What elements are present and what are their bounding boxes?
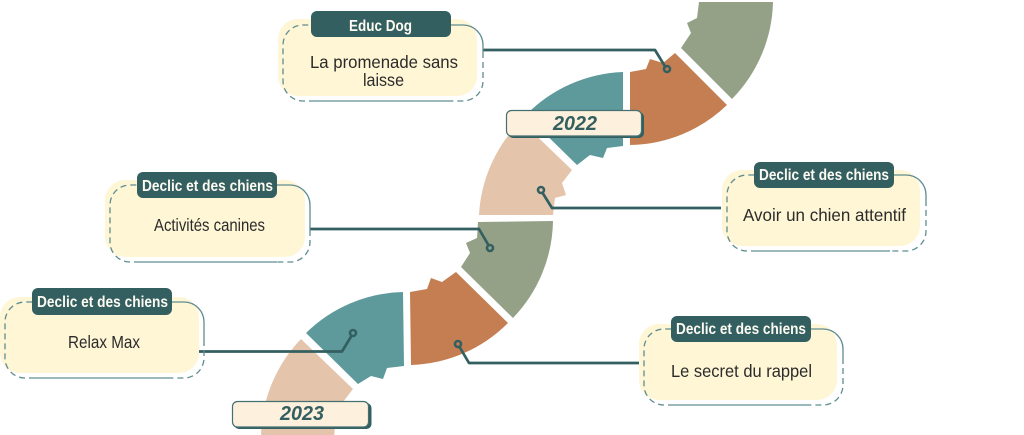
header pill [311,11,451,37]
card outline [283,25,483,101]
card background [639,324,837,400]
connector: Le secret du rappel [455,341,643,363]
card: Avoir un chien attentif [722,162,926,251]
segment: top teal [526,72,623,165]
card outline [5,302,204,378]
card background [722,170,920,246]
card: Relax Max [0,288,204,378]
year label: 2023: 2023 [279,403,324,425]
body text: Activités canines [154,215,265,235]
year label: 2022: 2022 [552,113,597,135]
segment: middle orange [410,272,508,365]
header text: Declic et des chiens [142,178,273,195]
header pill [671,316,811,342]
header pill [32,288,172,315]
card background [278,19,477,96]
card outline [110,185,310,262]
card background [0,297,199,373]
year label: 2022 [506,110,644,138]
segment: lower teal [306,292,404,384]
connector: Educ Dog [483,50,670,72]
segment: top orange [630,53,727,145]
body text: Relax Max [68,332,140,352]
winding path segments [261,2,773,435]
segment: lower beige [261,339,353,435]
header text: Declic et des chiens [676,321,806,338]
header text: Educ Dog [349,18,412,35]
card: Educ Dog [278,11,483,101]
segment: top green [681,2,773,99]
card: Le secret du rappel [639,316,843,405]
year label: 2023 [232,402,372,429]
card outline [727,175,926,251]
body text: Avoir un chien attentif [743,205,906,225]
header pill [137,172,277,198]
connector: Relax Max [199,330,356,352]
card background [105,180,305,257]
header pill [754,162,894,188]
card: Activités canines [105,172,310,262]
header text: Declic et des chiens [759,167,889,184]
body text: La promenade sans [310,52,458,72]
segment: middle green [461,221,553,318]
body text: Le secret du rappel [671,361,812,381]
connector: Avoir un chien attentif [538,187,721,208]
segment: upper beige [479,121,572,215]
card outline [644,329,843,405]
connector: Activités canines [310,229,493,251]
card: Educ Dog: laisse [363,70,404,90]
header text: Declic et des chiens [37,294,168,311]
